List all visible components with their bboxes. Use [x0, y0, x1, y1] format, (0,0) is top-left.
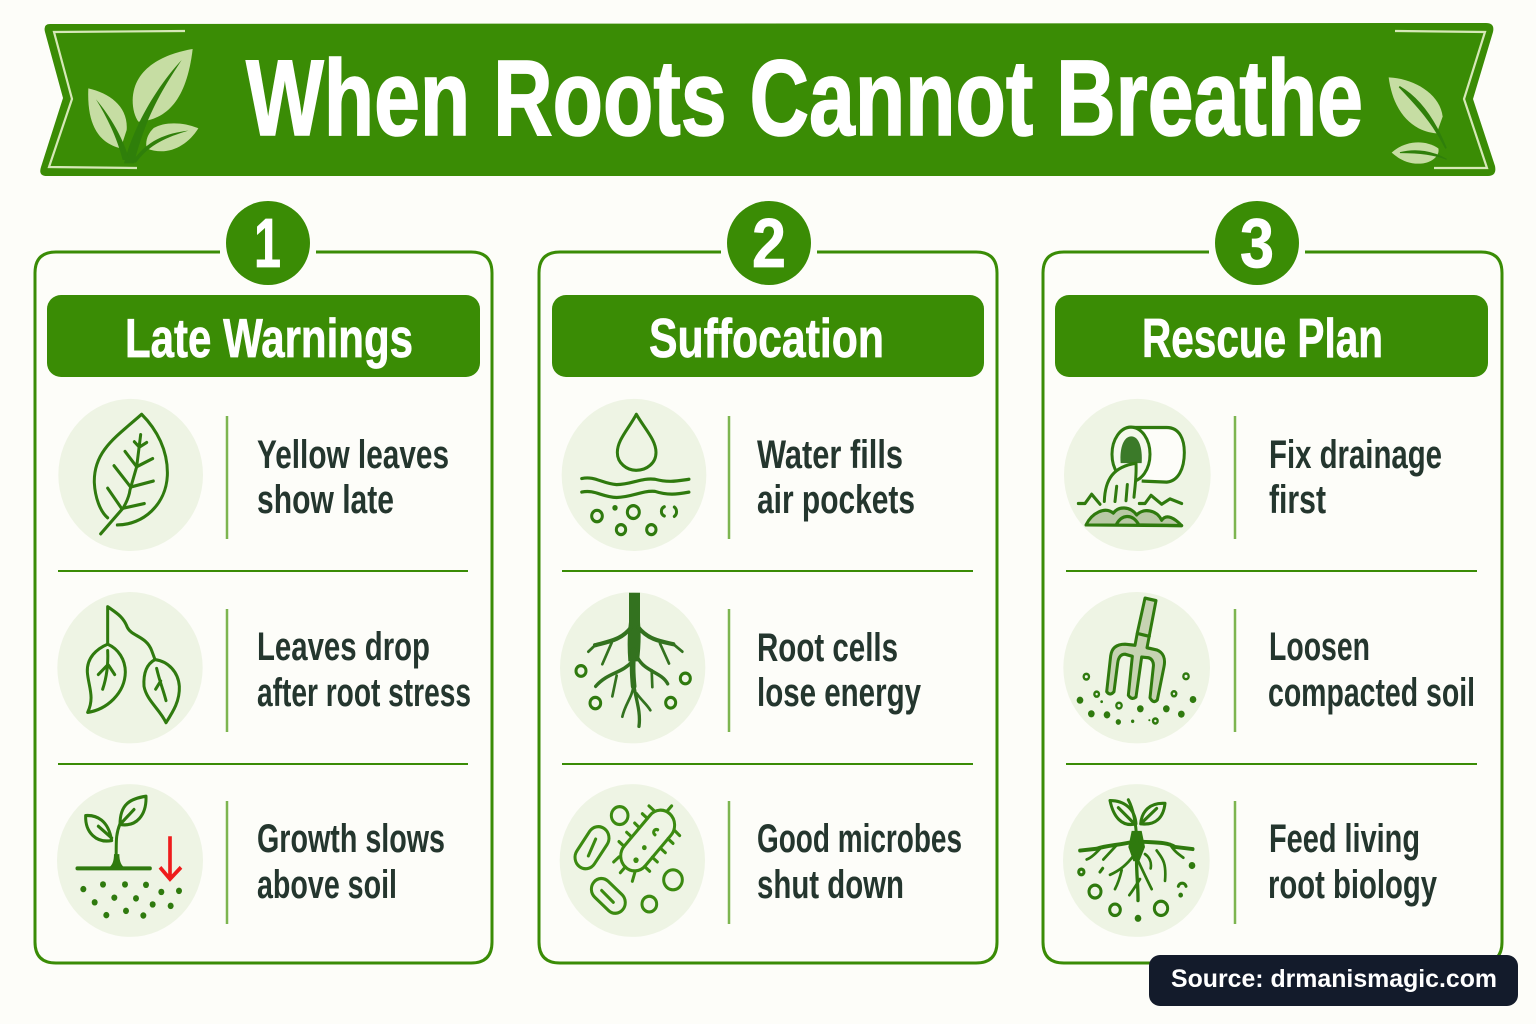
text: yellow leaves: [257, 433, 449, 522]
number badge 1: 1: [254, 204, 281, 282]
text: good microbes: [757, 817, 962, 907]
panel: rescue plan: [1043, 201, 1502, 963]
icon: garden fork: [1063, 592, 1210, 743]
text: root cells: lose energy: [757, 671, 922, 715]
text: root cells: Root cells: [757, 626, 898, 670]
icon: microbes: [560, 784, 705, 937]
text: leaves drop: Leaves drop: [257, 625, 430, 669]
text: feed living: [1268, 817, 1438, 907]
text: growth slows: Growth slows: [257, 817, 445, 861]
text: good microbes: shut down: [757, 863, 904, 907]
text: fix drainage: [1269, 433, 1442, 522]
text: leaves drop: [257, 625, 471, 715]
number badge 2: 2: [752, 204, 786, 282]
heading: late warnings: Late Warnings: [125, 307, 413, 369]
text: loosen: [1268, 625, 1475, 715]
text: water fills: Water fills: [757, 433, 903, 477]
heading: suffocation: [552, 295, 984, 377]
heading: rescue plan: Rescue Plan: [1142, 307, 1383, 369]
text: yellow leaves: Yellow leaves: [257, 433, 449, 477]
icon: right leaves: [1389, 77, 1447, 164]
text: yellow leaves: show late: [257, 478, 394, 522]
text: water fills: [757, 433, 915, 522]
panel: late warnings: [35, 201, 492, 963]
text: root cells: [757, 626, 922, 715]
text: fix drainage: Fix drainage: [1269, 433, 1442, 477]
icon: water drop over soil: [562, 399, 706, 551]
icon: slowed growth: [57, 784, 203, 937]
icon: roots: [560, 592, 705, 743]
icon: living roots: [1063, 784, 1210, 937]
heading: rescue plan: [1055, 295, 1488, 377]
text: feed living: root biology: [1268, 863, 1438, 907]
icon: red down arrow: [160, 836, 181, 879]
text: growth slows: above soil: [257, 863, 397, 907]
source badge: [1149, 955, 1518, 1006]
text: fix drainage: first: [1269, 478, 1326, 522]
source badge: Source: drmanismagic.com: [1171, 965, 1497, 993]
heading: suffocation: Suffocation: [649, 307, 884, 369]
number badge 3: 3: [1240, 204, 1274, 282]
title banner: [40, 23, 1495, 176]
icon: leaf: [58, 399, 203, 551]
heading: late warnings: [47, 295, 480, 377]
icon: drainage pipe: [1064, 399, 1211, 551]
number badge 3: [1215, 201, 1299, 285]
text: growth slows: [257, 817, 445, 907]
icon: left leaves: [88, 49, 198, 163]
panel: suffocation: [539, 201, 997, 963]
text: good microbes: Good microbes: [757, 817, 962, 861]
text: water fills: air pockets: [757, 478, 915, 522]
text: leaves drop: after root stress: [257, 671, 471, 715]
number badge 2: [727, 201, 811, 285]
icon: drooping leaves: [57, 592, 203, 743]
text: loosen: Loosen: [1269, 625, 1370, 669]
number badge 1: [226, 201, 310, 285]
text: feed living: Feed living: [1269, 817, 1420, 861]
